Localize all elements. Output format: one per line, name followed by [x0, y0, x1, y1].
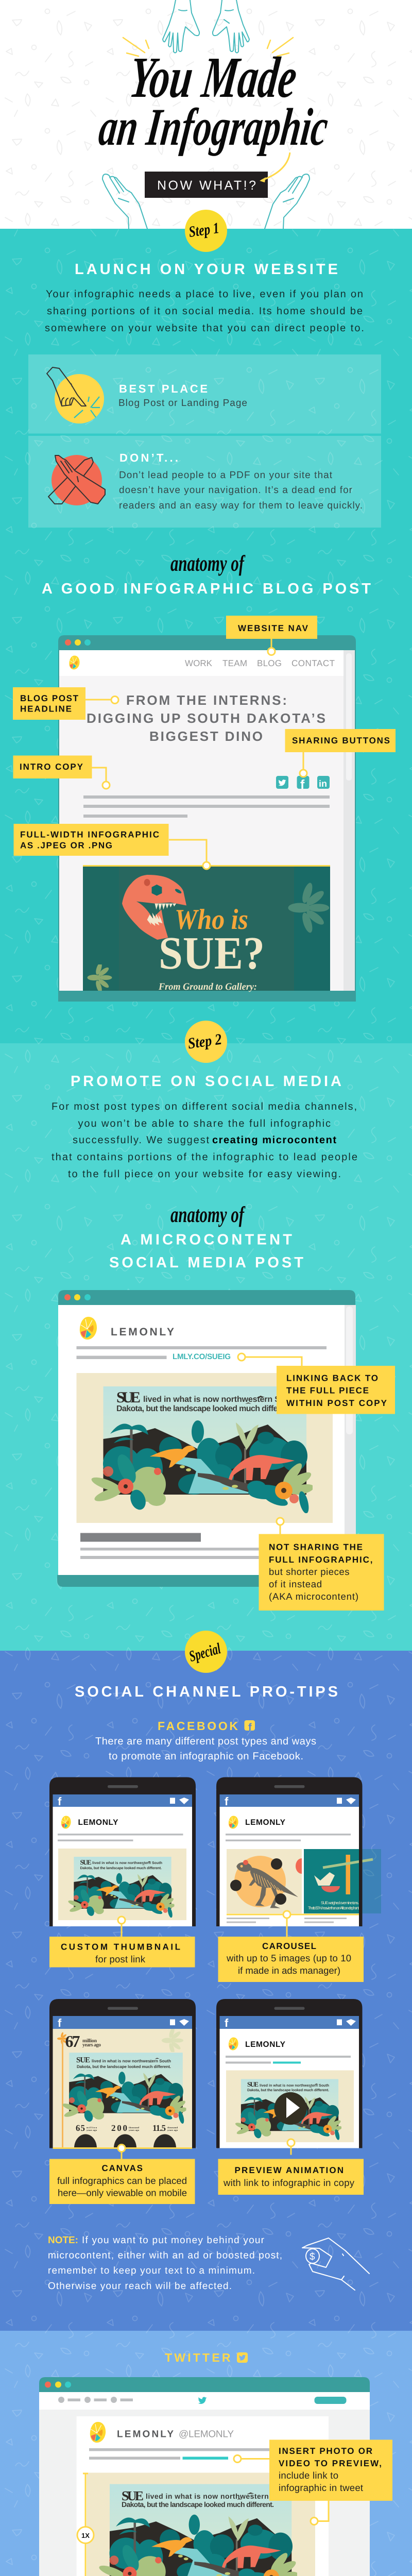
text block: note about ads: remember to keep your text to a minimum. — [48, 2265, 255, 2276]
text block: step 2 intro: that contains portions of the infographic to lead people — [52, 1151, 357, 1163]
blog headline — [87, 692, 325, 744]
callout: carousel: CAROUSEL — [262, 1941, 316, 1951]
timeline numbers: years ago — [167, 2129, 178, 2131]
badge: 1x: 1X — [81, 2532, 90, 2539]
phone: carousel — [216, 1777, 381, 1926]
text block: step 2 intro: to the full piece on your website for easy viewing. — [68, 1168, 341, 1180]
website nav links: TEAM — [222, 658, 247, 668]
carousel card one — [227, 1849, 302, 1913]
blog headline: BIGGEST DINO — [149, 728, 263, 744]
callout: not sharing the full infographic: of it instead — [269, 1579, 322, 1589]
callout: full-width infographic: FULL-WIDTH INFOGRAPHIC — [20, 829, 159, 840]
callout: intro copy: INTRO COPY — [20, 762, 83, 772]
callout: carousel — [218, 1911, 364, 1982]
browser mock: twitter: @LEMONLY — [179, 2429, 234, 2440]
title — [96, 45, 331, 157]
website nav links: WORK — [185, 658, 213, 668]
timeline numbers: thousand — [129, 2126, 139, 2129]
logo: lemon — [80, 1317, 97, 1340]
text block: step 1 intro: somewhere on your website that you can direct people to. — [45, 323, 364, 334]
illustration card — [76, 1373, 333, 1523]
text block: note about ads: microcontent, either with an ad or boosted post, — [48, 2250, 282, 2261]
callout: website nav: WEBSITE NAV — [238, 623, 308, 633]
phone: canvas: f — [58, 2016, 62, 2029]
text block: facebook intro: There are many different post types and ways — [95, 1736, 316, 1747]
timeline numbers: thousand — [167, 2126, 178, 2129]
text block: note about ads: Otherwise your reach will be affected. — [48, 2281, 232, 2292]
callout: canvas: here—only viewable on mobile — [58, 2188, 187, 2198]
illustration card: Dakota, but the landscape looked much different. — [122, 2500, 274, 2509]
carousel card two: That’s 50% heavier than an African elephant — [308, 1906, 359, 1910]
phone: preview animation: SUE — [247, 2080, 259, 2088]
subheading: facebook: FACEBOOK — [158, 1719, 238, 1733]
section: step 2 teal background — [0, 1043, 412, 1651]
timeline numbers: years ago — [129, 2129, 140, 2131]
badge: special: Special — [187, 1640, 223, 1665]
callout: custom thumbnail: CUSTOM THUMBNAIL — [61, 1942, 180, 1952]
callout: not sharing the full infographic: (AKA microcontent) — [269, 1591, 358, 1602]
phone: preview animation: LEMONLY — [245, 2040, 286, 2049]
panel: don't — [28, 436, 381, 528]
phone: custom thumbnail: LEMONLY — [78, 1818, 118, 1827]
callout: linking back — [238, 1353, 395, 1414]
illustration card: SUE — [116, 1389, 141, 1406]
illustration card: SUE — [122, 2488, 144, 2503]
decorative yellow burst rays — [123, 38, 293, 56]
timeline numbers — [76, 2123, 178, 2133]
text block: step 1 intro — [45, 289, 364, 334]
sharing icons — [276, 776, 330, 792]
icon: play button — [274, 2092, 307, 2125]
timeline numbers: years ago — [87, 2129, 97, 2131]
callout: canvas: full infographics can be placed — [57, 2175, 187, 2186]
phone: canvas — [49, 1999, 196, 2149]
callout: insert photo or video: include link to — [279, 2470, 338, 2481]
blog headline: FROM THE INTERNS: — [126, 692, 287, 708]
browser mock: microcontent post: LMLY.CO/SUEIG — [173, 1352, 231, 1361]
subheading: facebook: f — [248, 1722, 252, 1733]
phone: custom thumbnail — [49, 1777, 196, 1926]
callout: full-width infographic: AS .JPEG OR .PNG — [20, 841, 112, 850]
callout: preview animation — [218, 2139, 364, 2195]
badge: special — [185, 1631, 227, 1673]
sharing icons: in — [319, 778, 327, 789]
phone: canvas: Dakota, but the landscape looked much different. — [77, 2064, 171, 2069]
heading: a microcontent social media post: SOCIAL MEDIA POST — [109, 1255, 303, 1271]
section: twitter light blue background — [0, 2331, 412, 2576]
subtitle box: now what: NOW WHAT!? — [157, 178, 256, 193]
heading: social channel pro-tips: SOCIAL CHANNEL PRO-TIPS — [75, 1684, 338, 1700]
badge: step 1 — [185, 210, 227, 252]
browser mock: microcontent post — [57, 1290, 356, 1587]
callout: insert photo or video: infographic in tweet — [279, 2482, 363, 2493]
section: step 1 teal background — [0, 229, 412, 1043]
heading: promote on social media: PROMOTE ON SOCIAL MEDIA — [71, 1073, 341, 1090]
text block: step 2 intro: you won’t be able to share the full infographic — [78, 1118, 331, 1129]
sharing icons: f — [300, 777, 305, 792]
callout: insert photo or video: VIDEO TO PREVIEW, — [279, 2459, 382, 2468]
callout: linking back: THE FULL PIECE — [286, 1386, 369, 1395]
timeline numbers: million — [87, 2126, 97, 2129]
callout: insert photo or video: INSERT PHOTO OR — [279, 2446, 372, 2456]
text block: step 2 intro: successfully. We suggest — [73, 1134, 209, 1146]
twitter nav placeholders — [58, 2397, 133, 2403]
subtitle box: now what — [145, 172, 268, 198]
illustration card — [87, 2473, 315, 2576]
badge: step 2 — [185, 1021, 227, 1063]
icon: lower hands reaching up — [102, 174, 310, 229]
illustration card: lived in what is now northwestern South — [143, 1395, 298, 1404]
callout: canvas — [49, 2144, 195, 2204]
browser mock: blog post — [58, 635, 356, 1002]
text block: step 1 intro: sharing portions of it on social media. Its home should be — [47, 306, 363, 317]
heading: launch on your website: LAUNCH ON YOUR WEBSITE — [75, 261, 338, 278]
text block: step 2 intro — [52, 1101, 357, 1180]
callout: blog post headline — [13, 687, 118, 720]
icon: hand holding coin: $ — [310, 2251, 315, 2262]
website nav links: BLOG — [257, 658, 282, 668]
illustration card: lived in what is now northwestern South — [146, 2492, 293, 2500]
timeline numbers: 200 — [111, 2123, 127, 2133]
timeline numbers: 11.5 — [152, 2123, 166, 2133]
panel: don't: Don’t lead people to a PDF on your site that — [119, 470, 333, 481]
icon: hand holding coin — [302, 2238, 369, 2290]
callout: intro copy — [13, 755, 110, 789]
callout: sharing buttons: SHARING BUTTONS — [292, 736, 390, 745]
infographic cover preview: From Ground to Gallery: — [158, 981, 257, 992]
heading: a microcontent social media post — [109, 1231, 303, 1271]
callout: full-width infographic — [13, 824, 210, 869]
icon: crossed hands — [48, 455, 105, 505]
phone: preview animation — [216, 1999, 363, 2148]
section: facebook blue background — [0, 1651, 412, 2331]
phone: carousel: LEMONLY — [245, 1818, 286, 1827]
text block: note about ads: NOTE: — [48, 2235, 78, 2246]
callout: not sharing the full infographic: FULL INFOGRAPHIC, — [269, 1555, 373, 1565]
intro copy placeholder lines — [83, 795, 330, 818]
timeline numbers: 65 — [76, 2123, 85, 2133]
browser mock: microcontent post: LEMONLY — [111, 1326, 174, 1338]
website nav links — [185, 658, 335, 668]
section: white intro background — [0, 0, 412, 229]
callout: custom thumbnail: for post link — [95, 1954, 146, 1964]
phone: canvas: years ago — [82, 2042, 101, 2048]
phone: canvas: SUE — [76, 2056, 90, 2064]
browser mock: twitter — [39, 2377, 370, 2576]
phone: custom thumbnail: Dakota, but the landscape looked much different. — [80, 1866, 162, 1870]
logo: lemon — [69, 656, 80, 669]
callout: insert photo or video — [234, 2440, 392, 2524]
phone: custom thumbnail: f — [58, 1795, 62, 1808]
phone: canvas: lived in what is now northwestern South — [92, 2059, 171, 2063]
browser mock: twitter: LEMONLY — [117, 2429, 174, 2440]
callout: custom thumbnail — [49, 1917, 195, 1967]
panel: best place: Blog Post or Landing Page — [118, 398, 247, 409]
callout: carousel: with up to 5 images (up to 10 — [226, 1953, 351, 1963]
website nav links: CONTACT — [291, 658, 335, 668]
callout: preview animation: with link to infographic in copy — [223, 2177, 355, 2188]
callout: carousel: if made in ads manager) — [238, 1965, 340, 1976]
title: You Made — [126, 45, 300, 110]
dinosaur skull — [122, 875, 186, 940]
carousel card two — [304, 1849, 381, 1913]
badge: step 2: Step 2 — [187, 1031, 223, 1052]
subheading: twitter: TWITTER — [165, 2351, 231, 2364]
phone: custom thumbnail: lived in what is now northwestern South — [92, 1861, 162, 1865]
carousel card two: SUE weighed over nine tons. — [321, 1901, 359, 1905]
phone: preview animation: f — [225, 2016, 229, 2029]
callout: sharing buttons — [285, 729, 396, 777]
text block: step 1 intro: Your infographic needs a place to live, even if you plan on — [46, 289, 363, 300]
infographic cover preview — [83, 865, 330, 993]
infographic cover preview: Who is — [175, 904, 248, 936]
badge: step 1: Step 1 — [187, 219, 220, 241]
text block: step 2 intro: For most post types on different social media channels, — [52, 1101, 357, 1112]
phone: canvas: 67 — [65, 2032, 80, 2050]
blog headline: DIGGING UP SOUTH DAKOTA’S — [87, 710, 325, 726]
panel: don't: readers and an easy way for them to leave quickly. — [119, 500, 363, 511]
heading: a good infographic blog post: A GOOD INFOGRAPHIC BLOG POST — [42, 581, 371, 597]
icon: pointing hand — [47, 367, 104, 423]
text block: facebook intro — [95, 1736, 316, 1762]
callout: linking back: LINKING BACK TO — [286, 1374, 378, 1383]
callout: keep ratio 2:1 — [20, 2473, 315, 2576]
phone: canvas: million — [82, 2038, 97, 2044]
heading: a microcontent social media post: A MICROCONTENT — [121, 1231, 292, 1248]
infographic cover preview: SUE? — [159, 928, 265, 979]
script heading: anatomy of: anatomy of — [170, 1202, 246, 1227]
text block: facebook intro: to promote an infographic on Facebook. — [109, 1751, 303, 1762]
callout: website nav — [226, 616, 317, 655]
panel: best place — [28, 354, 381, 434]
phone: custom thumbnail: SUE — [80, 1858, 92, 1866]
phone: preview animation: lived in what is now northwestern South — [260, 2083, 329, 2088]
text block: step 2 intro: creating microcontent — [212, 1134, 336, 1146]
panel: best place: BEST PLACE — [119, 382, 208, 395]
text block: note about ads — [48, 2235, 282, 2292]
badge: 1x — [77, 2527, 94, 2543]
leaves — [288, 882, 329, 934]
phone: preview animation: Dakota, but the landscape looked much different. — [247, 2088, 329, 2092]
callout: not sharing the full infographic: NOT SHARING THE — [269, 1543, 363, 1552]
arrow to now what — [260, 152, 290, 182]
illustration card: Dakota, but the landscape looked much different. — [116, 1404, 294, 1413]
phone: carousel: f — [225, 1795, 229, 1808]
callout: not sharing the full infographic — [259, 1518, 384, 1611]
callout: linking back: WITHIN POST COPY — [286, 1398, 387, 1408]
callout: preview animation: PREVIEW ANIMATION — [235, 2165, 344, 2175]
panel: don't: DON’T... — [119, 451, 178, 464]
text block: note about ads: If you want to put money behind your — [82, 2235, 265, 2246]
icon: top hands reaching down — [163, 0, 249, 53]
script heading: anatomy of: anatomy of — [170, 551, 246, 576]
callout: not sharing the full infographic: but shorter pieces — [269, 1566, 349, 1577]
callout: blog post headline: BLOG POST — [20, 693, 79, 703]
callout: canvas: CANVAS — [102, 2163, 143, 2173]
callout: blog post headline: HEADLINE — [20, 704, 72, 714]
panel: don't: doesn’t have your navigation. It’s a dead end for — [119, 485, 353, 496]
